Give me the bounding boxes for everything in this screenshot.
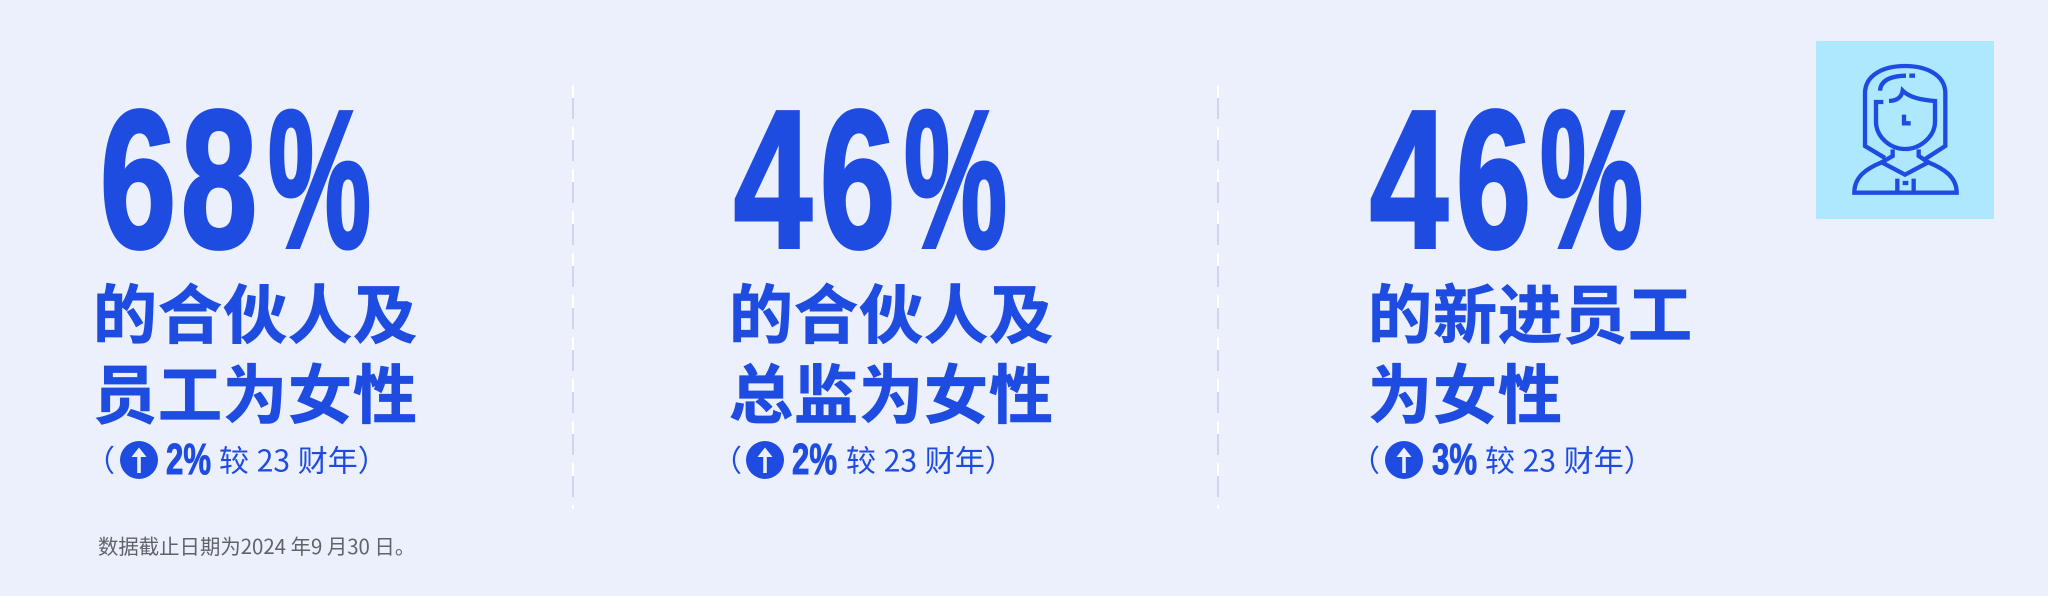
heading: 的合伙人及总监为女性: 总监为女性 — [729, 345, 1054, 437]
stat: 46%: 6 — [820, 70, 895, 289]
icon: up arrow — [1385, 441, 1423, 479]
icon: up arrow — [120, 441, 158, 479]
stat: 68% — [100, 70, 371, 289]
heading: 的合伙人及员工为女性 — [93, 265, 418, 437]
stat: 46%: % — [904, 70, 1007, 289]
icon: up arrow — [746, 441, 784, 479]
change line: up 2% vs FY23 — [85, 435, 388, 484]
stat: 68%: 6 — [100, 70, 176, 289]
heading: 的新进员工为女性: 为女性 — [1368, 345, 1563, 437]
stat: 46%: 4 — [1370, 70, 1448, 289]
stat: 68%: % — [268, 70, 371, 289]
change line: up 3% vs FY23: （ — [1350, 436, 1380, 480]
footnote: 数据截止日期为2024 年9 月30 日。 — [98, 530, 415, 560]
change line: up 3% vs FY23: 3% — [1432, 435, 1477, 484]
stat: 46%: 6 — [1456, 70, 1531, 289]
heading: 的合伙人及总监为女性: 的合伙人及 — [729, 265, 1054, 357]
panel: 68% partners and staff — [85, 70, 418, 484]
stat: 46% — [1370, 70, 1643, 289]
heading: 的合伙人及总监为女性 — [729, 265, 1054, 437]
change line: up 3% vs FY23: 较 23 财年） — [1485, 436, 1654, 480]
change line: up 2% vs FY23: 2% — [166, 435, 211, 484]
heading: 的合伙人及员工为女性: 员工为女性 — [93, 345, 418, 437]
icon: woman in light blue tile — [1816, 41, 1994, 219]
panel: 46% new hires — [1350, 70, 1693, 484]
change line: up 3% vs FY23 — [1350, 435, 1654, 484]
change line: up 2% vs FY23: （ — [85, 436, 115, 480]
heading: 的新进员工为女性: 的新进员工 — [1368, 265, 1693, 357]
stat: 68%: 8 — [181, 70, 257, 289]
panel: 46% partners and directors — [712, 70, 1054, 484]
stat: 46%: % — [1540, 70, 1643, 289]
stat: 46% — [734, 70, 1007, 289]
change line: up 2% vs FY23: 2% — [792, 435, 837, 484]
change line: up 2% vs FY23 — [712, 435, 1015, 484]
change line: up 2% vs FY23: 较 23 财年） — [219, 436, 388, 480]
change line: up 2% vs FY23: 较 23 财年） — [846, 436, 1015, 480]
heading: 的合伙人及员工为女性: 的合伙人及 — [93, 265, 418, 357]
heading: 的新进员工为女性 — [1368, 265, 1693, 437]
change line: up 2% vs FY23: （ — [712, 436, 742, 480]
stat: 46%: 4 — [734, 70, 812, 289]
